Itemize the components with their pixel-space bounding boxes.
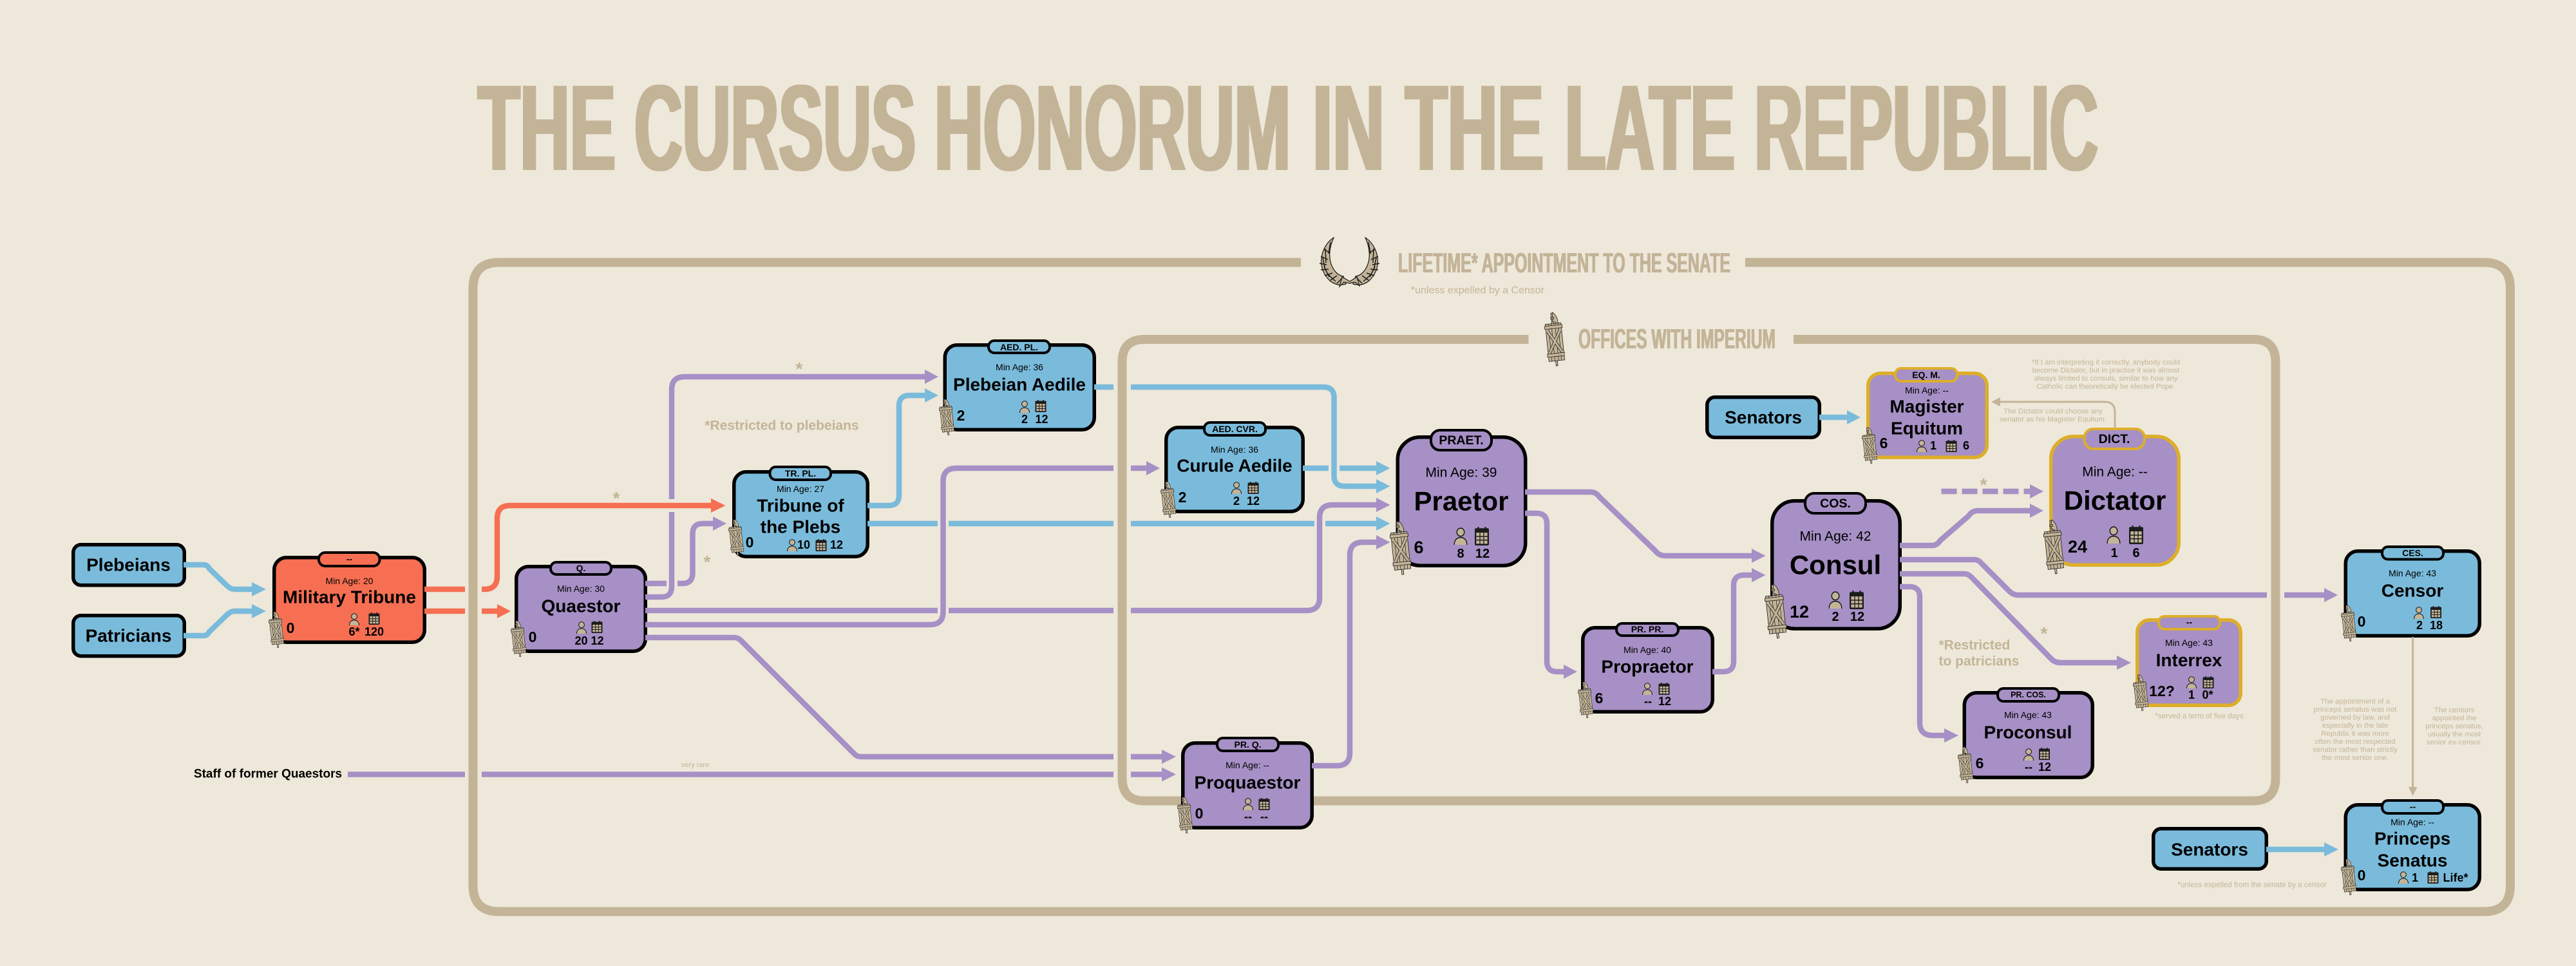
node: Dictator xyxy=(2051,429,2179,565)
node: Curule Aedile: Curule Aedile xyxy=(1177,456,1293,475)
node: Propraetor xyxy=(1583,623,1712,712)
node: Princeps Senatus: Life* xyxy=(2443,871,2468,884)
node: Military Tribune: -- xyxy=(346,554,352,564)
node: Curule Aedile: 12 xyxy=(1247,495,1260,507)
note: unless expelled by a censor: *unless expelled by a Censor xyxy=(1411,285,1545,296)
node: Praetor: 12 xyxy=(1475,547,1490,561)
node: Magister Equitum xyxy=(1868,368,1987,457)
note: princeps appointment: often the most respected xyxy=(2315,738,2396,746)
node: Censor: CES. xyxy=(2402,547,2423,558)
note: dictator eligibility xyxy=(2032,359,2180,390)
node: Proquaestor: Proquaestor xyxy=(1195,773,1301,792)
node: Quaestor: 0 xyxy=(529,629,536,645)
node: Censor: Censor xyxy=(2382,581,2443,600)
node: Plebeians xyxy=(73,545,184,585)
node: Plebeian Aedile: 12 xyxy=(1035,413,1048,426)
node: Plebeian Aedile: 2 xyxy=(957,407,965,424)
title xyxy=(478,60,2098,196)
note: princeps appointment: senator rather than strictly xyxy=(2313,746,2398,753)
node: Proquaestor: 0 xyxy=(1195,805,1203,822)
node: Plebeian Aedile: Plebeian Aedile xyxy=(953,375,1086,394)
node: Military Tribune: Military Tribune xyxy=(283,587,416,607)
markers: asterisks: * xyxy=(796,359,803,379)
note: restricted to patricians: to patricians xyxy=(1938,654,2019,668)
node: Plebeian Aedile: Min Age: 36 xyxy=(996,362,1043,372)
node: Consul: Min Age: 42 xyxy=(1800,529,1871,544)
title: THE xyxy=(478,60,616,196)
node: Military Tribune: Min Age: 20 xyxy=(326,576,374,586)
note: censors appoint princeps: princeps senatus, xyxy=(2425,723,2483,730)
node: Dictator: Min Age: -- xyxy=(2082,465,2148,479)
node: Tribune of the Plebs: 10 xyxy=(797,538,810,551)
note: dictator eligibility: Catholic can theoretically be elected Pope. xyxy=(2036,383,2175,390)
node: Proconsul: PR. COS. xyxy=(2011,690,2046,699)
node: Senators bottom: Senators xyxy=(2171,840,2248,859)
node: Praetor: Min Age: 39 xyxy=(1426,465,1497,480)
note: magister equitum choice: senator as his Magister Equitum. xyxy=(2000,416,2107,424)
note: dictator eligibility: become Dictator, but in practice it was almost xyxy=(2032,367,2180,375)
node: Consul: COS. xyxy=(1820,497,1851,511)
node: Proconsul: 12 xyxy=(2038,761,2051,773)
node: Interrex: Interrex xyxy=(2156,650,2222,670)
node: Military Tribune: 0 xyxy=(287,620,294,636)
node: Princeps Senatus: 1 xyxy=(2412,871,2418,884)
node: Magister Equitum: 6 xyxy=(1963,439,1969,452)
node: Propraetor: -- xyxy=(1644,695,1652,708)
note: unless expelled from the senate: *unless expelled from the senate by a censor xyxy=(2177,881,2327,889)
node: Propraetor: PR. PR. xyxy=(1631,624,1663,634)
node: Curule Aedile: Min Age: 36 xyxy=(1211,444,1258,455)
node: Tribune of the Plebs: Tribune of xyxy=(757,496,844,515)
markers: asterisks xyxy=(613,359,2048,643)
title: THE xyxy=(1405,60,1544,196)
arrows: coral paths xyxy=(424,498,725,618)
note: magister equitum choice: The Dictator could choose any xyxy=(2003,408,2103,415)
node: Quaestor: Q. xyxy=(576,563,585,573)
node: Tribune of the Plebs: 12 xyxy=(830,538,843,551)
node: Dictator: DICT. xyxy=(2099,432,2130,446)
node: Propraetor: 12 xyxy=(1658,695,1671,708)
node: Magister Equitum: EQ. M. xyxy=(1912,370,1940,380)
note: restricted to patricians: *Restricted xyxy=(1938,638,2010,653)
node: Magister Equitum: Equitum xyxy=(1891,419,1963,438)
node: Proquaestor: PR. Q. xyxy=(1234,739,1262,750)
title: REPUBLIC xyxy=(1754,60,2098,196)
node: Praetor: 6 xyxy=(1414,538,1424,557)
node: Senators bottom xyxy=(2154,829,2266,869)
title: IN xyxy=(1312,60,1385,196)
note: censors appoint princeps: senior ex-censor. xyxy=(2427,739,2482,746)
arrows: blue paths xyxy=(184,387,2338,857)
icon: laurel wreath xyxy=(1320,238,1379,287)
note: restricted to patricians xyxy=(1938,638,2019,668)
title: LATE xyxy=(1565,60,1735,196)
node: Censor: 2 xyxy=(2416,619,2423,632)
node: Dictator: 1 xyxy=(2110,546,2118,560)
node: Quaestor: 20 12 xyxy=(574,634,604,647)
note: princeps appointment: Republic it was more xyxy=(2321,730,2389,738)
node: Plebeian Aedile: 2 xyxy=(1021,413,1028,426)
note: princeps appointment: princeps senatus was not xyxy=(2314,706,2397,714)
node: Dictator: 6 xyxy=(2132,546,2140,560)
node: Magister Equitum: Min Age: -- xyxy=(1905,385,1949,395)
node: Interrex xyxy=(2137,616,2240,705)
heading: lifetime appointment: LIFETIME* APPOINTMENT TO THE SENATE xyxy=(1398,248,1730,279)
node: Tribune of the Plebs: 0 xyxy=(746,534,753,551)
node: Propraetor: Propraetor xyxy=(1601,657,1694,676)
node: Quaestor xyxy=(516,562,645,651)
arrows: beige appointment arrows xyxy=(1991,397,2417,796)
node: Princeps Senatus: -- xyxy=(2410,801,2416,811)
node: Censor xyxy=(2345,547,2479,636)
note: interrex term: *served a term of five days xyxy=(2155,712,2244,720)
note: princeps appointment: the most senior one. xyxy=(2322,754,2389,762)
note: magister equitum choice xyxy=(2000,408,2107,424)
node: Censor: 18 xyxy=(2430,619,2443,632)
node: Princeps Senatus: 0 xyxy=(2358,867,2365,884)
note: censors appoint princeps: The censors xyxy=(2434,706,2475,714)
markers: asterisks: * xyxy=(704,552,711,572)
note: princeps appointment: especially in the late xyxy=(2322,722,2388,730)
node: Consul: Consul xyxy=(1790,550,1881,580)
node: Quaestor: Min Age: 30 xyxy=(557,583,605,594)
node: Praetor xyxy=(1397,430,1526,565)
node: Magister Equitum: 6 xyxy=(1880,435,1888,451)
node: Censor: 0 xyxy=(2358,613,2365,630)
node: Praetor: Praetor xyxy=(1414,486,1509,516)
node: Interrex: 1 xyxy=(2188,688,2195,701)
node: Curule Aedile: AED. CVR. xyxy=(1212,424,1258,434)
node: Tribune of the Plebs: Min Age: 27 xyxy=(777,484,824,494)
node: Proquaestor: -- xyxy=(1244,810,1252,823)
panel: offices with imperium frame xyxy=(1122,339,2276,801)
node: Dictator: 24 xyxy=(2068,537,2087,556)
node: Magister Equitum: Magister xyxy=(1889,397,1964,416)
node: Senators top: Senators xyxy=(1725,407,1802,428)
note: princeps appointment: governed by law, and xyxy=(2320,714,2390,721)
heading: offices with imperium: OFFICES WITH IMPERIUM xyxy=(1578,324,1776,355)
icon: fasces heading xyxy=(1543,312,1566,366)
node: Consul xyxy=(1772,493,1900,629)
node: Princeps Senatus: Senatus xyxy=(2378,850,2447,871)
node: Interrex: 0* xyxy=(2202,688,2213,701)
node: Princeps Senatus xyxy=(2345,800,2479,889)
node: Military Tribune: 120 xyxy=(365,625,384,638)
node: Proconsul: -- xyxy=(2025,761,2032,773)
note: dictator eligibility: *If I am interpreting it correctly, anybody could xyxy=(2032,359,2180,366)
node: Propraetor: 6 xyxy=(1595,690,1603,706)
node: Proconsul: Min Age: 43 xyxy=(2004,710,2052,720)
node: Praetor: PRAET. xyxy=(1439,433,1484,448)
node: Propraetor: Min Age: 40 xyxy=(1624,645,1671,655)
node: Princeps Senatus: Princeps xyxy=(2374,828,2450,849)
node: Proquaestor: Min Age: -- xyxy=(1226,760,1269,770)
title: HONORUM xyxy=(934,60,1291,196)
markers: asterisks: * xyxy=(613,488,620,508)
panel: lifetime appointment to the senate frame xyxy=(473,263,2510,912)
node: Proconsul: 6 xyxy=(1976,755,1984,772)
markers: asterisks: * xyxy=(1980,475,1987,495)
node: Curule Aedile: 2 xyxy=(1233,495,1240,507)
note: dictator eligibility: always limited to consuls, similar to how any xyxy=(2034,375,2178,383)
node: Curule Aedile xyxy=(1166,422,1303,511)
node: Dictator: Dictator xyxy=(2064,486,2166,515)
fasces icons on every office xyxy=(268,398,2357,896)
node: Praetor: 8 xyxy=(1457,547,1464,561)
note: very rare: very rare xyxy=(681,761,709,769)
node: Consul: 12 xyxy=(1850,610,1864,624)
node: Princeps Senatus: Min Age: -- xyxy=(2391,817,2434,827)
node: Quaestor: Quaestor xyxy=(542,596,621,616)
note: censors appoint princeps xyxy=(2425,706,2483,746)
node: Consul: 2 xyxy=(1832,610,1839,624)
node: Proconsul xyxy=(1964,688,2092,777)
node: Curule Aedile: 2 xyxy=(1179,489,1186,506)
node: Magister Equitum: 1 xyxy=(1930,439,1937,452)
markers: asterisks: * xyxy=(2041,623,2048,643)
node: Plebeian Aedile: AED. PL. xyxy=(1000,342,1038,352)
node: Proquaestor xyxy=(1183,738,1312,828)
node: Plebeians: Plebeians xyxy=(86,555,171,574)
node: Tribune of the Plebs: TR. PL. xyxy=(785,468,816,478)
node: Consul: 12 xyxy=(1790,602,1809,621)
arrows: purple paths xyxy=(348,370,2338,782)
node: Interrex: -- xyxy=(2186,617,2192,627)
node: Interrex: Min Age: 43 xyxy=(2165,638,2213,648)
node: Proquaestor: -- xyxy=(1260,810,1268,823)
node: Senators top xyxy=(1707,397,1819,437)
node: Tribune of the Plebs xyxy=(734,467,867,556)
node: Censor: Min Age: 43 xyxy=(2389,568,2436,578)
node: Plebeian Aedile xyxy=(945,341,1094,430)
node: Military Tribune xyxy=(274,553,424,642)
note: censors appoint princeps: usually the most xyxy=(2428,730,2481,738)
node: Military Tribune: 6* xyxy=(348,625,360,638)
node: Patricians: Patricians xyxy=(86,626,171,645)
note: princeps appointment: The appointment of a xyxy=(2320,698,2390,706)
text: staff of former quaestors: Staff of former Quaestors xyxy=(194,768,342,781)
note: censors appoint princeps: appointed the xyxy=(2432,715,2477,723)
node: Tribune of the Plebs: the Plebs xyxy=(761,516,840,537)
node: Patricians xyxy=(73,616,184,656)
node: Interrex: 12? xyxy=(2149,683,2175,699)
node: Proconsul: Proconsul xyxy=(1984,723,2072,742)
note: restricted to plebeians: *Restricted to plebeians xyxy=(705,419,859,433)
title: CURSUS xyxy=(634,60,916,196)
note: princeps appointment xyxy=(2313,698,2398,762)
